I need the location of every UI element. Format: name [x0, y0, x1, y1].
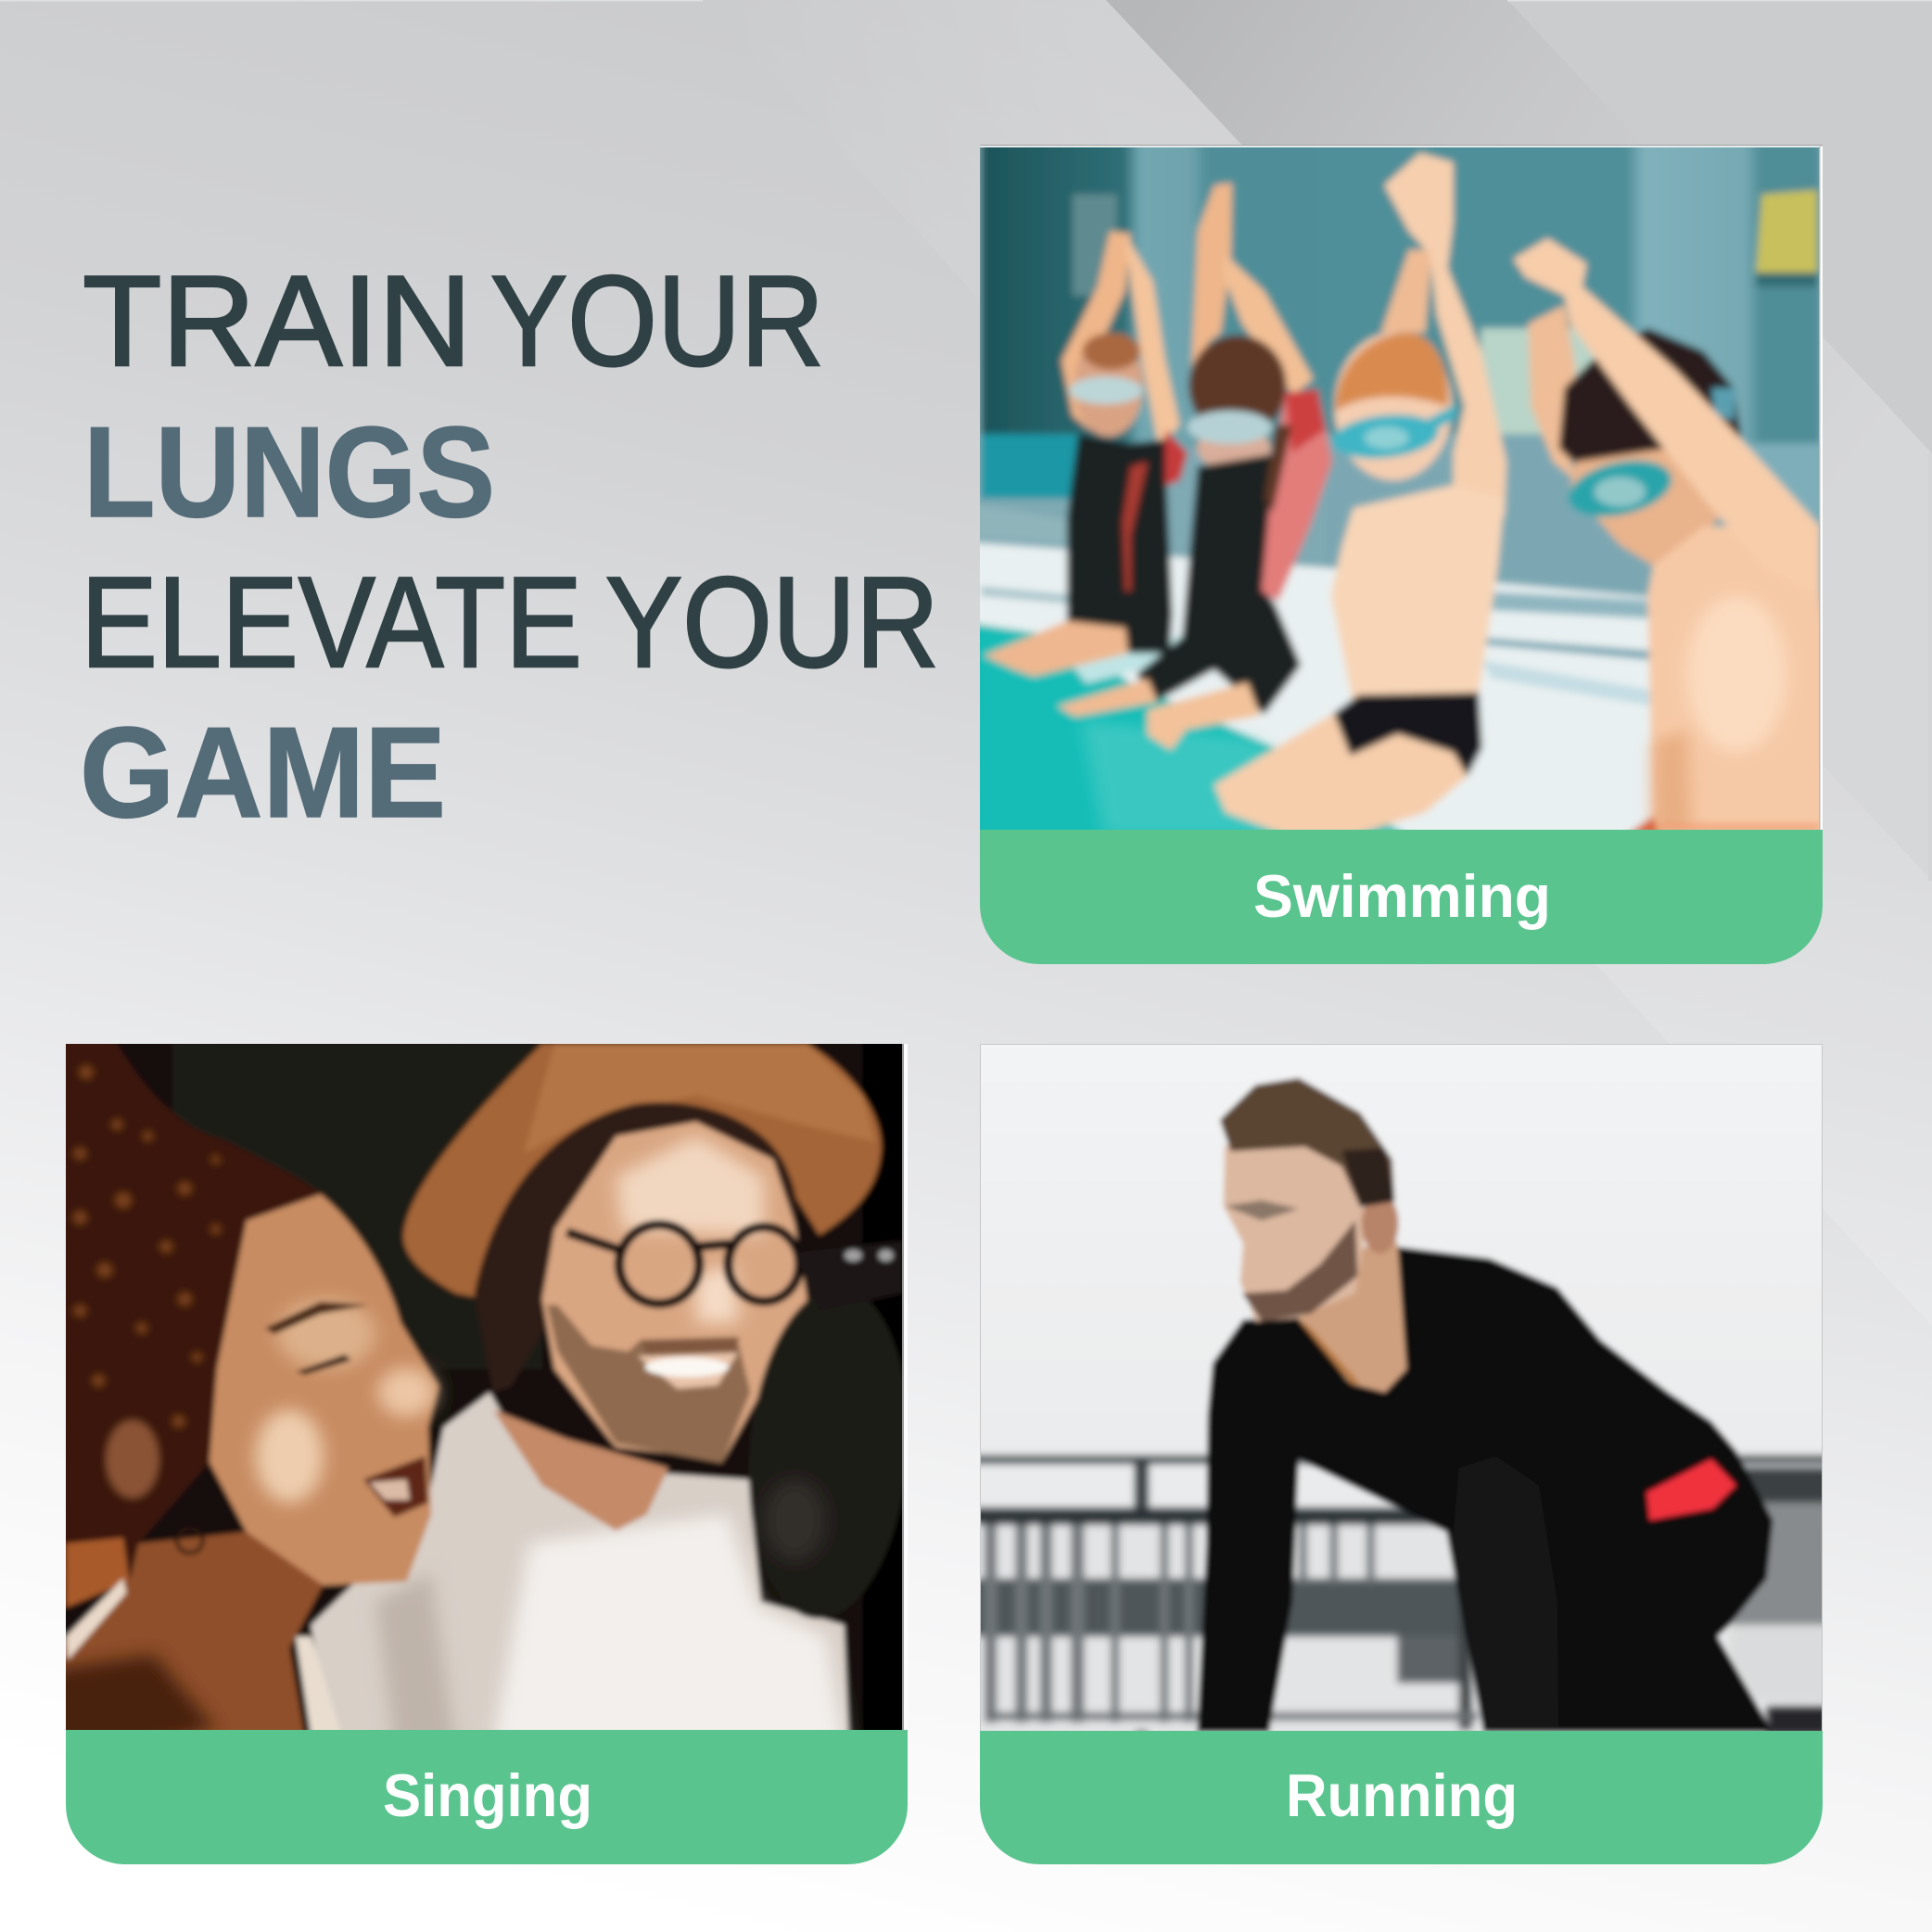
photo: children swimmers at pool edge	[980, 147, 1819, 830]
kid 2	[1191, 183, 1232, 379]
photo: runner in starting position	[981, 1075, 1822, 1731]
neck	[493, 1410, 668, 1531]
railing	[966, 1456, 1853, 1738]
head	[1224, 1142, 1367, 1321]
pool water	[980, 619, 1407, 830]
caption bar: singing	[66, 1730, 908, 1864]
woman's face	[210, 1194, 439, 1585]
man's hair	[475, 1102, 797, 1392]
glasses	[566, 1225, 800, 1303]
beard	[547, 1305, 750, 1463]
caption bar: swimming	[980, 830, 1823, 964]
caption bar: running: Running	[1286, 1761, 1518, 1829]
title: GAME	[80, 701, 446, 845]
microphone and pop filter	[746, 1297, 902, 1621]
man's face	[542, 1122, 807, 1459]
title	[80, 249, 939, 845]
panel: running card	[954, 1020, 1853, 1864]
neck	[1299, 1241, 1406, 1392]
woman's hair	[66, 1044, 319, 1567]
panel: singing card	[37, 1020, 936, 1864]
belt	[1646, 1459, 1736, 1520]
man's body	[1197, 1247, 1773, 1733]
title: LUNGS	[83, 400, 495, 544]
hat	[403, 1044, 881, 1299]
pool deck	[980, 538, 1656, 830]
kid 1	[1061, 231, 1131, 429]
kid 3	[1381, 249, 1432, 333]
title: YOUR	[605, 551, 939, 694]
shirt	[311, 1392, 850, 1776]
title: TRAIN	[83, 249, 472, 393]
caption bar: running	[980, 1731, 1823, 1864]
photo: two people singing into a microphone	[66, 1044, 902, 1730]
woman's neck and chest	[66, 1527, 326, 1730]
caption bar: swimming: Swimming	[1253, 862, 1551, 930]
title: ELEVATE	[81, 551, 582, 694]
kid 4	[1528, 305, 1575, 480]
panel: swimming card	[980, 145, 1823, 964]
caption bar: singing: Singing	[383, 1761, 592, 1829]
title: YOUR	[490, 249, 824, 393]
